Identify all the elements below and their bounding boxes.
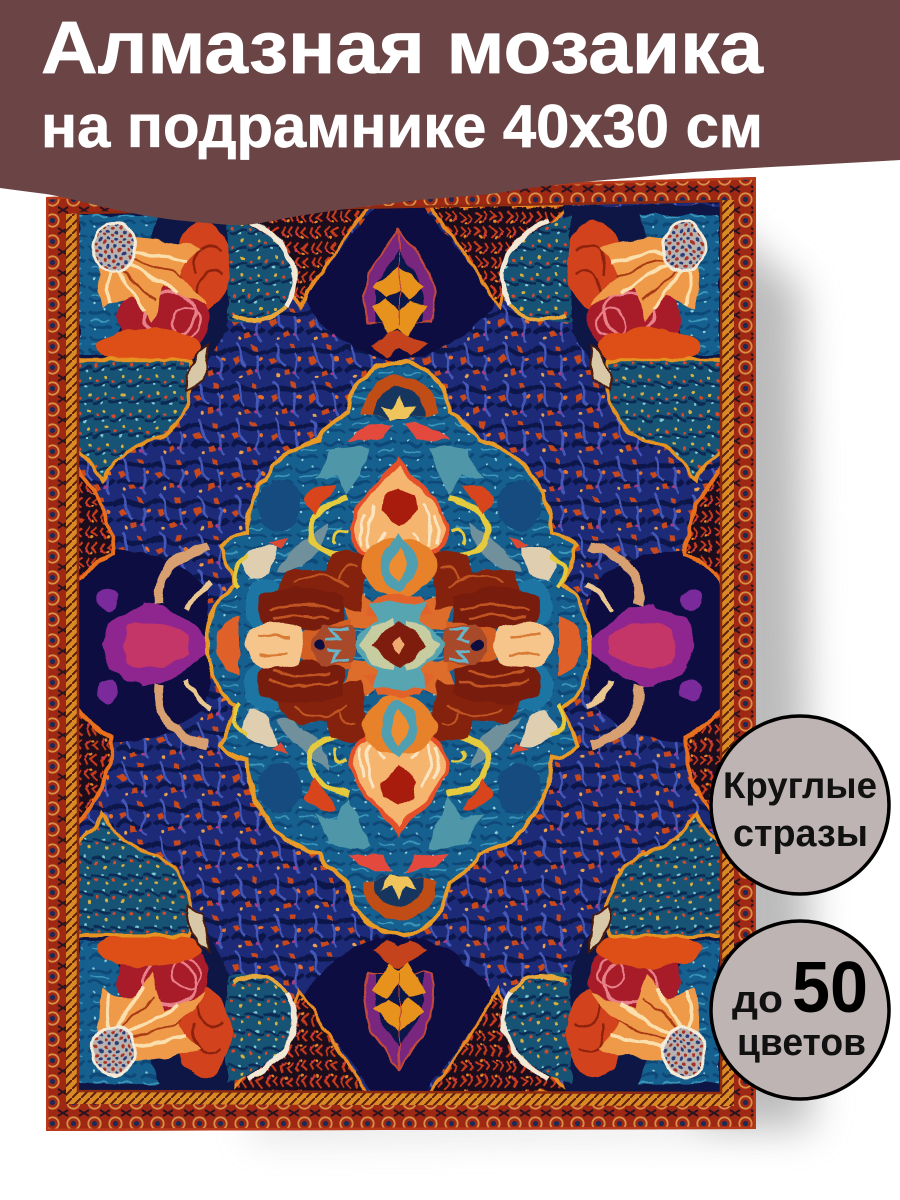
badge: up to 50 colours — [711, 921, 889, 1099]
gold inner line — [78, 201, 721, 1093]
gold inner border — [66, 200, 734, 1106]
badge text small: до — [732, 979, 783, 1021]
title — [41, 6, 764, 160]
title line 2: на подрамнике 40х30 см — [41, 93, 763, 160]
badge text line 1: Круглые — [723, 765, 877, 806]
top left quadrant — [69, 205, 399, 650]
title line 1: Алмазная мозаика — [41, 6, 764, 89]
badge number: 50 — [792, 948, 868, 1028]
badge text line 2: стразы — [733, 813, 868, 855]
badge: round rhinestones — [711, 716, 889, 894]
badge text line: цветов — [737, 1022, 866, 1064]
outer edge line — [47, 178, 755, 1130]
inner field — [60, 190, 740, 1110]
canvas drop shadow — [250, 205, 812, 1132]
top right quadrant — [399, 205, 729, 650]
header band — [0, 0, 900, 225]
bottom left quadrant — [69, 639, 399, 1094]
outer ornamental border — [40, 170, 760, 1140]
bottom right quadrant — [399, 639, 729, 1094]
diamond mosaic artwork — [40, 170, 760, 1140]
